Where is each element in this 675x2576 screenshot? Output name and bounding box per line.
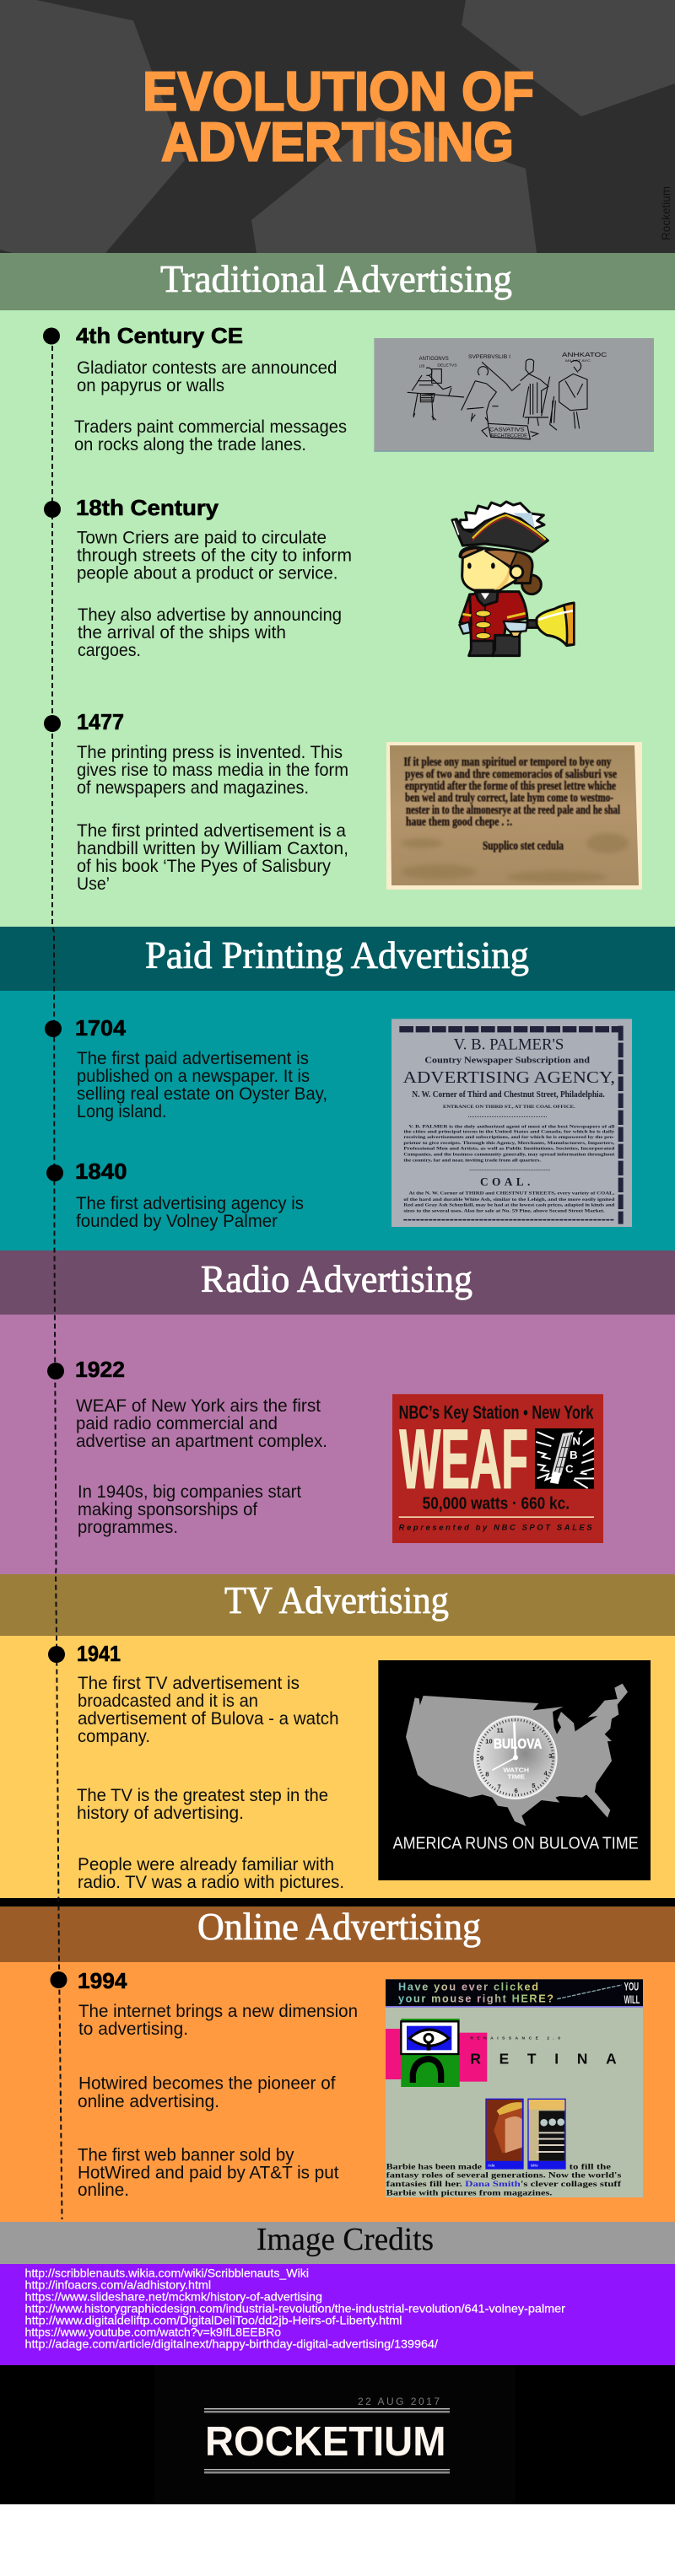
entry: 1477: of newspapers and magazines. <box>77 777 309 798</box>
entry: 1941: advertisement of Bulova - a watch <box>78 1708 339 1729</box>
entry: 1477 <box>77 709 348 894</box>
caption text: Barbie with pictures from magazines. <box>386 2188 552 2197</box>
clock: bulova watch: 11 <box>497 1726 504 1734</box>
entry: 1922 <box>75 1357 327 1537</box>
thumbnail pair: Ada <box>488 2163 495 2167</box>
icon: nbc microphone: N <box>572 1434 580 1447</box>
entry: 1922: In 1940s, big companies start <box>78 1482 301 1502</box>
image: gladiator graffiti <box>374 338 654 452</box>
image: v. b. palmer advertisement: sizes to the several uses. Also for sale at No. 59 Pine, above Second Street Market. <box>403 1208 605 1213</box>
footer: rocketium logo: 22 AUG 2017 <box>358 2396 440 2407</box>
clock: bulova watch: 4 <box>544 1770 548 1777</box>
footer: rocketium logo <box>0 2365 675 2504</box>
image: v. b. palmer advertisement: Country Newspaper Subscription and <box>424 1057 590 1066</box>
entry: 1941: The first TV advertisement is <box>78 1673 300 1693</box>
image: v. b. palmer advertisement: Red and Gray Ash Schuylkill, may be had at the lowest cash prices, adapted in kinds and <box>403 1203 615 1208</box>
image: gladiator graffiti: ANHKATOC <box>562 351 608 358</box>
entry: 1704: 1704 <box>75 1015 127 1041</box>
image: v. b. palmer advertisement: Professional Men and Artists, as well as Public Institutions, Societies, Incorporated <box>403 1147 615 1152</box>
heading: image credits: Image Credits <box>256 2222 434 2257</box>
image: v. b. palmer advertisement: V. B. PALMER'S <box>454 1035 564 1053</box>
entry: 1941: radio. TV was a radio with pictures. <box>78 1872 344 1892</box>
heading: traditional advertising: Traditional Advertising <box>160 258 512 300</box>
clock: bulova watch: 9 <box>480 1755 483 1762</box>
title <box>143 61 534 172</box>
image: gladiator graffiti: ANTIGONVS <box>419 357 449 362</box>
image: caxton handbill: If it plese ony man spirituel or temporel to bye ony <box>403 756 612 769</box>
header panel <box>0 0 675 253</box>
image: caxton handbill <box>386 742 642 890</box>
clock: bulova watch: 8 <box>485 1770 489 1777</box>
entry: 1922: programmes. <box>78 1517 178 1537</box>
thumbnail pair <box>485 2099 566 2170</box>
image: caxton handbill: Supplico stet cedula <box>483 840 564 853</box>
entry: 1477: handbill written by William Caxton, <box>77 838 348 858</box>
entry: 1994: The internet brings a new dimension <box>78 2001 358 2021</box>
divider: black bar <box>0 1898 675 1906</box>
image: caxton handbill: pyes of two and thre comemoracios of salisburi vse <box>405 767 617 781</box>
image: hotwired retina web page <box>386 1979 643 2197</box>
map: united states <box>406 1684 628 1826</box>
icon: nbc microphone: C <box>565 1463 574 1476</box>
entry: 1704 <box>75 1015 327 1121</box>
image: weaf nbc poster <box>392 1394 603 1543</box>
footer: rocketium logo: ROCKETIUM <box>205 2419 446 2465</box>
entry: 18th century: people about a product or service. <box>77 563 338 583</box>
entry: 1840 <box>75 1159 304 1231</box>
watermark: Rocketium <box>660 186 672 240</box>
heading: online advertising: Online Advertising <box>197 1906 481 1948</box>
entry: 1704: Long island. <box>77 1101 167 1121</box>
entry: 4th century <box>74 323 347 454</box>
entry: 1922: paid radio commercial and <box>76 1413 278 1433</box>
heading: tv advertising: TV Advertising <box>224 1579 449 1621</box>
caption text: fantasy roles of several generations. Now the world's <box>386 2171 622 2180</box>
entry: 18th century: through streets of the city to inform <box>77 545 352 565</box>
entry: 1922: 1922 <box>75 1357 125 1382</box>
entry: 4th century: 4th Century CE <box>76 323 243 348</box>
image: v. b. palmer advertisement: ENTRANCE ON THIRD ST., AT THE COAL OFFICE. <box>443 1105 576 1110</box>
image: gladiator graffiti: BECHTBCCEDE <box>491 433 527 438</box>
image: gladiator graffiti: SVPERBVSLIB I <box>468 355 510 360</box>
entry: 1941: The TV is the greatest step in the <box>77 1785 328 1805</box>
entry: 1840: founded by Volney Palmer <box>76 1211 278 1231</box>
entry: 1477: The printing press is invented. This <box>77 742 343 762</box>
entry: 1922: advertise an apartment complex. <box>76 1431 327 1451</box>
entry: 18th century: Town Criers are paid to circulate <box>77 528 327 548</box>
clock: bulova watch: 3 <box>548 1752 552 1760</box>
credits list: http://infoacrs.com/a/adhistory.html <box>25 2278 211 2292</box>
image: hotwired retina web page: YOU <box>624 1980 639 1993</box>
entry: 1994: 1994 <box>78 1968 127 1993</box>
title: ADVERTISING <box>161 111 514 172</box>
image: gladiator graffiti: MILLAT AYC <box>565 358 591 363</box>
image: gladiator graffiti: DELETVS <box>437 363 457 367</box>
panel: radio advertising <box>0 1250 675 1574</box>
icon: nbc microphone: B <box>570 1449 578 1461</box>
entry: 1994 <box>78 1968 358 2200</box>
clock: bulova watch: 1 <box>532 1725 537 1733</box>
thumbnail pair: Idris <box>531 2163 538 2167</box>
entry: 4th century: Traders paint commercial messages <box>74 417 347 437</box>
entry: 4th century: Gladiator contests are announced <box>77 358 338 378</box>
image: town crier character <box>452 502 574 656</box>
heading: radio advertising: Radio Advertising <box>201 1258 472 1300</box>
timeline: dashed connector line <box>52 337 62 2219</box>
credits list: http://scribblenauts.wikia.com/wiki/Scribblenauts_Wiki <box>25 2267 309 2280</box>
entry: 1994: online. <box>78 2180 129 2200</box>
entry: 1941 <box>77 1641 344 1892</box>
clock: bulova watch: WATCH <box>503 1767 530 1774</box>
logo: retina eye figure <box>386 2019 487 2087</box>
entry: 18th century: They also advertise by announcing <box>78 605 342 625</box>
entry: 1477: of his book ‘The Pyes of Salisbury <box>77 856 331 876</box>
image: gladiator graffiti: LIB <box>419 364 424 368</box>
image: caxton handbill: haue them good chepe . :. <box>406 815 512 829</box>
clock: bulova watch: 10 <box>485 1738 493 1745</box>
panel: image credits <box>0 2222 675 2365</box>
icon: nbc microphone <box>535 1428 594 1489</box>
image: v. b. palmer advertisement <box>392 1019 632 1227</box>
entry: 1704: published on a newspaper. It is <box>77 1066 310 1086</box>
entry: 1477: The first printed advertisement is a <box>77 820 346 841</box>
image: v. b. palmer advertisement: receiving advertisements and subscriptions, and for which he is empowered by the pro- <box>403 1135 614 1140</box>
image: hotwired retina web page: your mouse right HERE? <box>398 1993 554 2005</box>
clock: bulova watch: 5 <box>532 1782 536 1789</box>
clock: bulova watch: 7 <box>498 1783 501 1791</box>
image: v. b. palmer advertisement: N. W. Corner of Third and Chestnut Street, Philadelphia. <box>412 1090 605 1100</box>
entry: 1704: selling real estate on Oyster Bay, <box>77 1084 327 1104</box>
entry: 1477: gives rise to mass media in the form <box>77 760 348 780</box>
timeline: dots <box>43 327 68 1988</box>
entry: 1941: People were already familiar with <box>78 1854 334 1874</box>
entry: 1941: 1941 <box>77 1641 121 1666</box>
image: v. b. palmer advertisement: prietor to give receipts. Through this Agency, Merchants, Manufacturers, Importers, <box>403 1141 615 1146</box>
image: weaf nbc poster: 50,000 watts · 660 kc. <box>423 1493 570 1513</box>
entry: 1994: Hotwired becomes the pioneer of <box>78 2073 336 2093</box>
credits list: https://www.slideshare.net/mckmk/history-of-advertising <box>25 2290 322 2304</box>
panel: paid printing advertising <box>0 927 675 1250</box>
caption text: to fill the <box>570 2162 611 2170</box>
entry: 4th century: on papyrus or walls <box>77 375 224 395</box>
clock: bulova watch <box>474 1717 557 1799</box>
entry: 1840: The first advertising agency is <box>76 1193 304 1213</box>
entry: 1941: broadcasted and it is an <box>78 1691 258 1711</box>
entry: 1840: 1840 <box>75 1159 127 1184</box>
entry: 1477: Use’ <box>77 874 110 894</box>
entry: 1477: 1477 <box>77 709 124 734</box>
entry: 1922: WEAF of New York airs the first <box>76 1396 321 1416</box>
image: bulova advertisement: AMERICA RUNS ON BULOVA TIME <box>393 1835 639 1853</box>
entry: 1994: online advertising. <box>78 2091 219 2111</box>
caption text: Barbie has been made <box>386 2162 482 2170</box>
entry: 4th century: on rocks along the trade lanes. <box>74 434 306 454</box>
image: v. b. palmer advertisement: COAL. <box>480 1175 530 1188</box>
image: v. b. palmer advertisement: At the N. W. Corner of THIRD and CHESTNUT STREETS, every variety of COAL, <box>408 1191 615 1197</box>
entry: 1941: history of advertising. <box>77 1803 244 1823</box>
entry: 18th century: the arrival of the ships with <box>78 622 286 643</box>
caption text: fantasies fill her. Dana Smith 's clever collages stuff <box>386 2180 622 2188</box>
entry: 18th century: cargoes. <box>78 640 141 660</box>
credits list: http://adage.com/article/digitalnext/happy-birthday-digital-advertising/139964/ <box>25 2337 438 2351</box>
panel: tv advertising <box>0 1574 675 1898</box>
heading: paid printing advertising: Paid Printing Advertising <box>145 934 529 976</box>
clock: bulova watch: 6 <box>515 1787 518 1794</box>
entry: 1704: The first paid advertisement is <box>77 1048 309 1068</box>
credits list <box>25 2267 565 2351</box>
credits list: http://www.historygraphicdesign.com/industrial-revolution/the-industrial-revolution/641-volney-palmer <box>25 2302 565 2315</box>
clock: bulova watch: TIME <box>507 1773 525 1781</box>
entry: 1994: to advertising. <box>78 2019 188 2039</box>
panel: traditional advertising <box>0 253 675 927</box>
image: hotwired retina web page: Have you ever clicked <box>398 1982 538 1993</box>
panel: online advertising <box>0 1906 675 2222</box>
clock: bulova watch: BULOVA <box>494 1736 542 1752</box>
image: v. b. palmer advertisement: the country, far and near, inviting trade from all quarters. <box>403 1159 542 1164</box>
credits list: https://www.youtube.com/watch?v=k9IfL8EEBRo <box>25 2326 281 2339</box>
image: v. b. palmer advertisement: Companies, and the business community generally, may spread information throughout <box>403 1152 614 1157</box>
image: v. b. palmer advertisement: V. B. PALMER is the duly authorized agent of most of the best Newspapers of all <box>408 1124 615 1129</box>
caption text <box>386 2162 622 2197</box>
image: bulova advertisement <box>378 1660 651 1880</box>
image: hotwired retina web page: RENAISSANCE 2.0 <box>470 2036 560 2041</box>
entry: 18th century <box>76 495 352 660</box>
image: weaf nbc poster: Represented by NBC SPOT SALES <box>399 1523 592 1531</box>
image: hotwired retina web page: WILL <box>624 1993 640 2006</box>
entry: 18th century: 18th Century <box>76 495 219 520</box>
image: v. b. palmer advertisement: of the hard and durable White Ash, similar to the Lehigh, and the more easily ignited <box>403 1197 615 1202</box>
title: EVOLUTION OF <box>143 61 534 121</box>
entry: 1994: HotWired and paid by AT&T is put <box>78 2162 339 2182</box>
credits list: http://www.digitaldeliftp.com/DigitalDeliToo/dd2jb-Heirs-of-Liberty.html <box>25 2314 402 2327</box>
image: v. b. palmer advertisement: ADVERTISING AGENCY, <box>403 1068 615 1087</box>
entry: 1922: making sponsorships of <box>78 1499 257 1519</box>
image: gladiator graffiti: CASVATIVS <box>489 428 525 433</box>
image: v. b. palmer advertisement: the cities and principal towns in the United States and Canada, for which he is daily <box>403 1129 615 1134</box>
image: weaf nbc poster: NBC’s Key Station • New York <box>399 1402 594 1423</box>
image: weaf nbc poster: WEAF <box>399 1413 528 1507</box>
image: hotwired retina web page: RETINA <box>470 2050 617 2067</box>
entry: 1941: company. <box>78 1726 150 1746</box>
entry: 1994: The first web banner sold by <box>78 2145 294 2165</box>
